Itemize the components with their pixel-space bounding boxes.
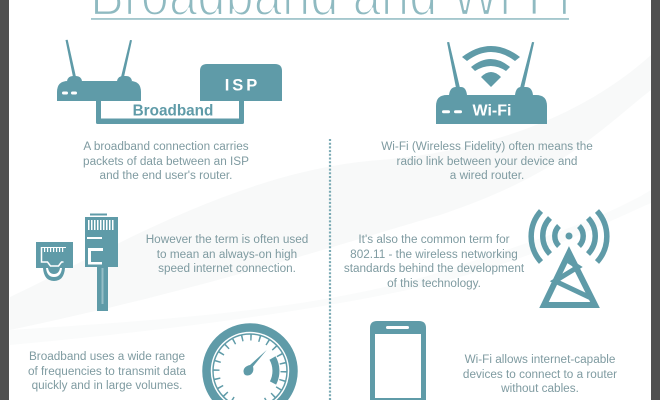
text: always-on connection: to mean an always-on high xyxy=(157,248,297,261)
text: 802.11 standards xyxy=(344,233,525,290)
text: broadband definition xyxy=(83,140,249,182)
divider xyxy=(329,139,331,400)
text: always-on connection: speed internet connection. xyxy=(158,262,296,275)
icon: broadband router linked to ISP: Broadband xyxy=(133,102,213,120)
text: Wi-Fi definition: Wi-Fi (Wireless Fidelity) often means the xyxy=(381,140,593,153)
text: always-on connection xyxy=(146,233,308,275)
text: 802.11 standards: standards behind the development xyxy=(344,262,525,275)
text: Wi-Fi definition: radio link between your device and xyxy=(397,155,577,168)
text: broadband frequencies: of frequencies to transmit data xyxy=(28,365,186,378)
text: broadband frequencies: quickly and in large volumes. xyxy=(32,379,182,392)
text: broadband definition: A broadband connection carries xyxy=(83,140,249,153)
text: broadband frequencies: Broadband uses a wide range xyxy=(29,350,186,363)
icon: broadband router linked to ISP xyxy=(57,40,282,124)
text: 802.11 standards: It's also the common term for xyxy=(358,233,510,246)
text: always-on connection: However the term is often used xyxy=(146,233,308,246)
icon: mobile device xyxy=(370,321,426,400)
text: broadband definition: and the end user's router. xyxy=(100,169,232,182)
text: Wi-Fi definition: a wired router. xyxy=(450,169,524,182)
text: Wi-Fi definition xyxy=(381,140,593,182)
text: 802.11 standards: of this technology. xyxy=(387,277,481,290)
text: 802.11 standards: 802.11 - the wireless networking xyxy=(350,248,518,261)
icon: Wi-Fi router xyxy=(436,42,547,124)
icon: speedometer xyxy=(206,328,294,400)
text: Wi-Fi devices xyxy=(463,353,617,395)
text: broadband frequencies xyxy=(28,350,186,392)
icon: Wi-Fi router: Wi-Fi xyxy=(473,102,511,119)
icon: broadband router linked to ISP: ISP xyxy=(225,77,260,95)
text: Wi-Fi devices: without cables. xyxy=(500,382,579,395)
text: Wi-Fi devices: Wi-Fi allows internet-capable xyxy=(465,353,616,366)
icon: wireless tower xyxy=(531,211,607,305)
icon: ethernet plug and socket xyxy=(36,214,118,311)
text: Wi-Fi devices: devices to connect to a router xyxy=(463,368,617,381)
text: broadband definition: packets of data between an ISP xyxy=(83,155,249,168)
